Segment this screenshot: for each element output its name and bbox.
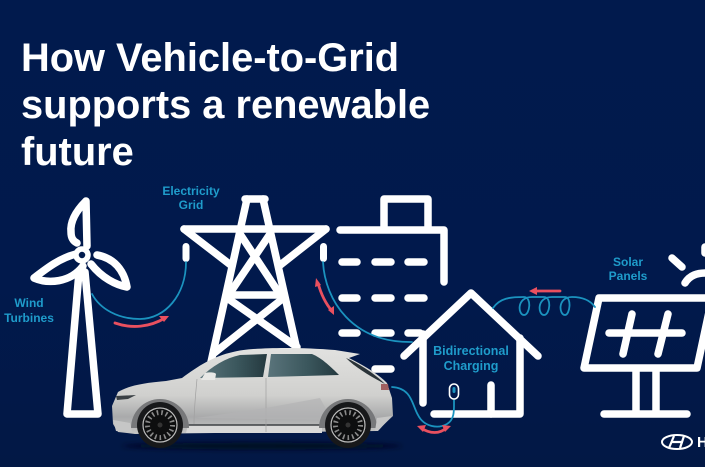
label: bidirectional charging: Bidirectional (433, 344, 509, 358)
label: solar panels: Solar (613, 255, 643, 269)
label: wind turbines (4, 296, 54, 325)
icon: pylon (184, 199, 326, 362)
label: electricity grid (162, 184, 220, 212)
connector: solar coil cable (493, 297, 595, 315)
icon: house (404, 293, 538, 414)
title (21, 36, 430, 174)
front wheel (137, 402, 183, 448)
label: bidirectional charging (433, 344, 509, 373)
car shadow (122, 442, 402, 450)
label: solar panels (609, 255, 648, 283)
label: wind turbines: Wind (14, 296, 44, 310)
rear wheel (325, 402, 371, 448)
rear window (346, 358, 385, 384)
arrow: car to charger two-way (417, 425, 451, 432)
wheel arches (131, 399, 189, 428)
title: future (21, 130, 134, 174)
connector: car to charger cable (392, 387, 454, 427)
tail light (381, 384, 389, 390)
logo: hyundai (662, 434, 705, 451)
label: solar panels: Panels (609, 269, 648, 283)
label: electricity grid: Electricity (162, 184, 220, 198)
title: supports a renewable (21, 83, 430, 127)
label: electricity grid: Grid (179, 198, 203, 212)
sill (186, 425, 322, 433)
arrow: solar to house (529, 287, 560, 295)
icon: wind turbine (34, 201, 127, 414)
title: How Vehicle-to-Grid (21, 36, 399, 80)
icon: building (340, 199, 444, 369)
headlight (116, 395, 136, 400)
mirror (201, 372, 216, 380)
arrow: grid to house two-way (315, 278, 334, 315)
side windows (200, 354, 267, 378)
icon: car (112, 348, 393, 448)
label: bidirectional charging: Charging (444, 359, 498, 373)
icon: solar panel (584, 247, 705, 414)
connector: turbine to pylon cable (92, 243, 190, 319)
connector: pylon to house cable (320, 243, 412, 342)
label: wind turbines: Turbines (4, 311, 54, 325)
arrow: turbine to grid (115, 316, 169, 326)
icon: wall charger plug (450, 384, 458, 399)
